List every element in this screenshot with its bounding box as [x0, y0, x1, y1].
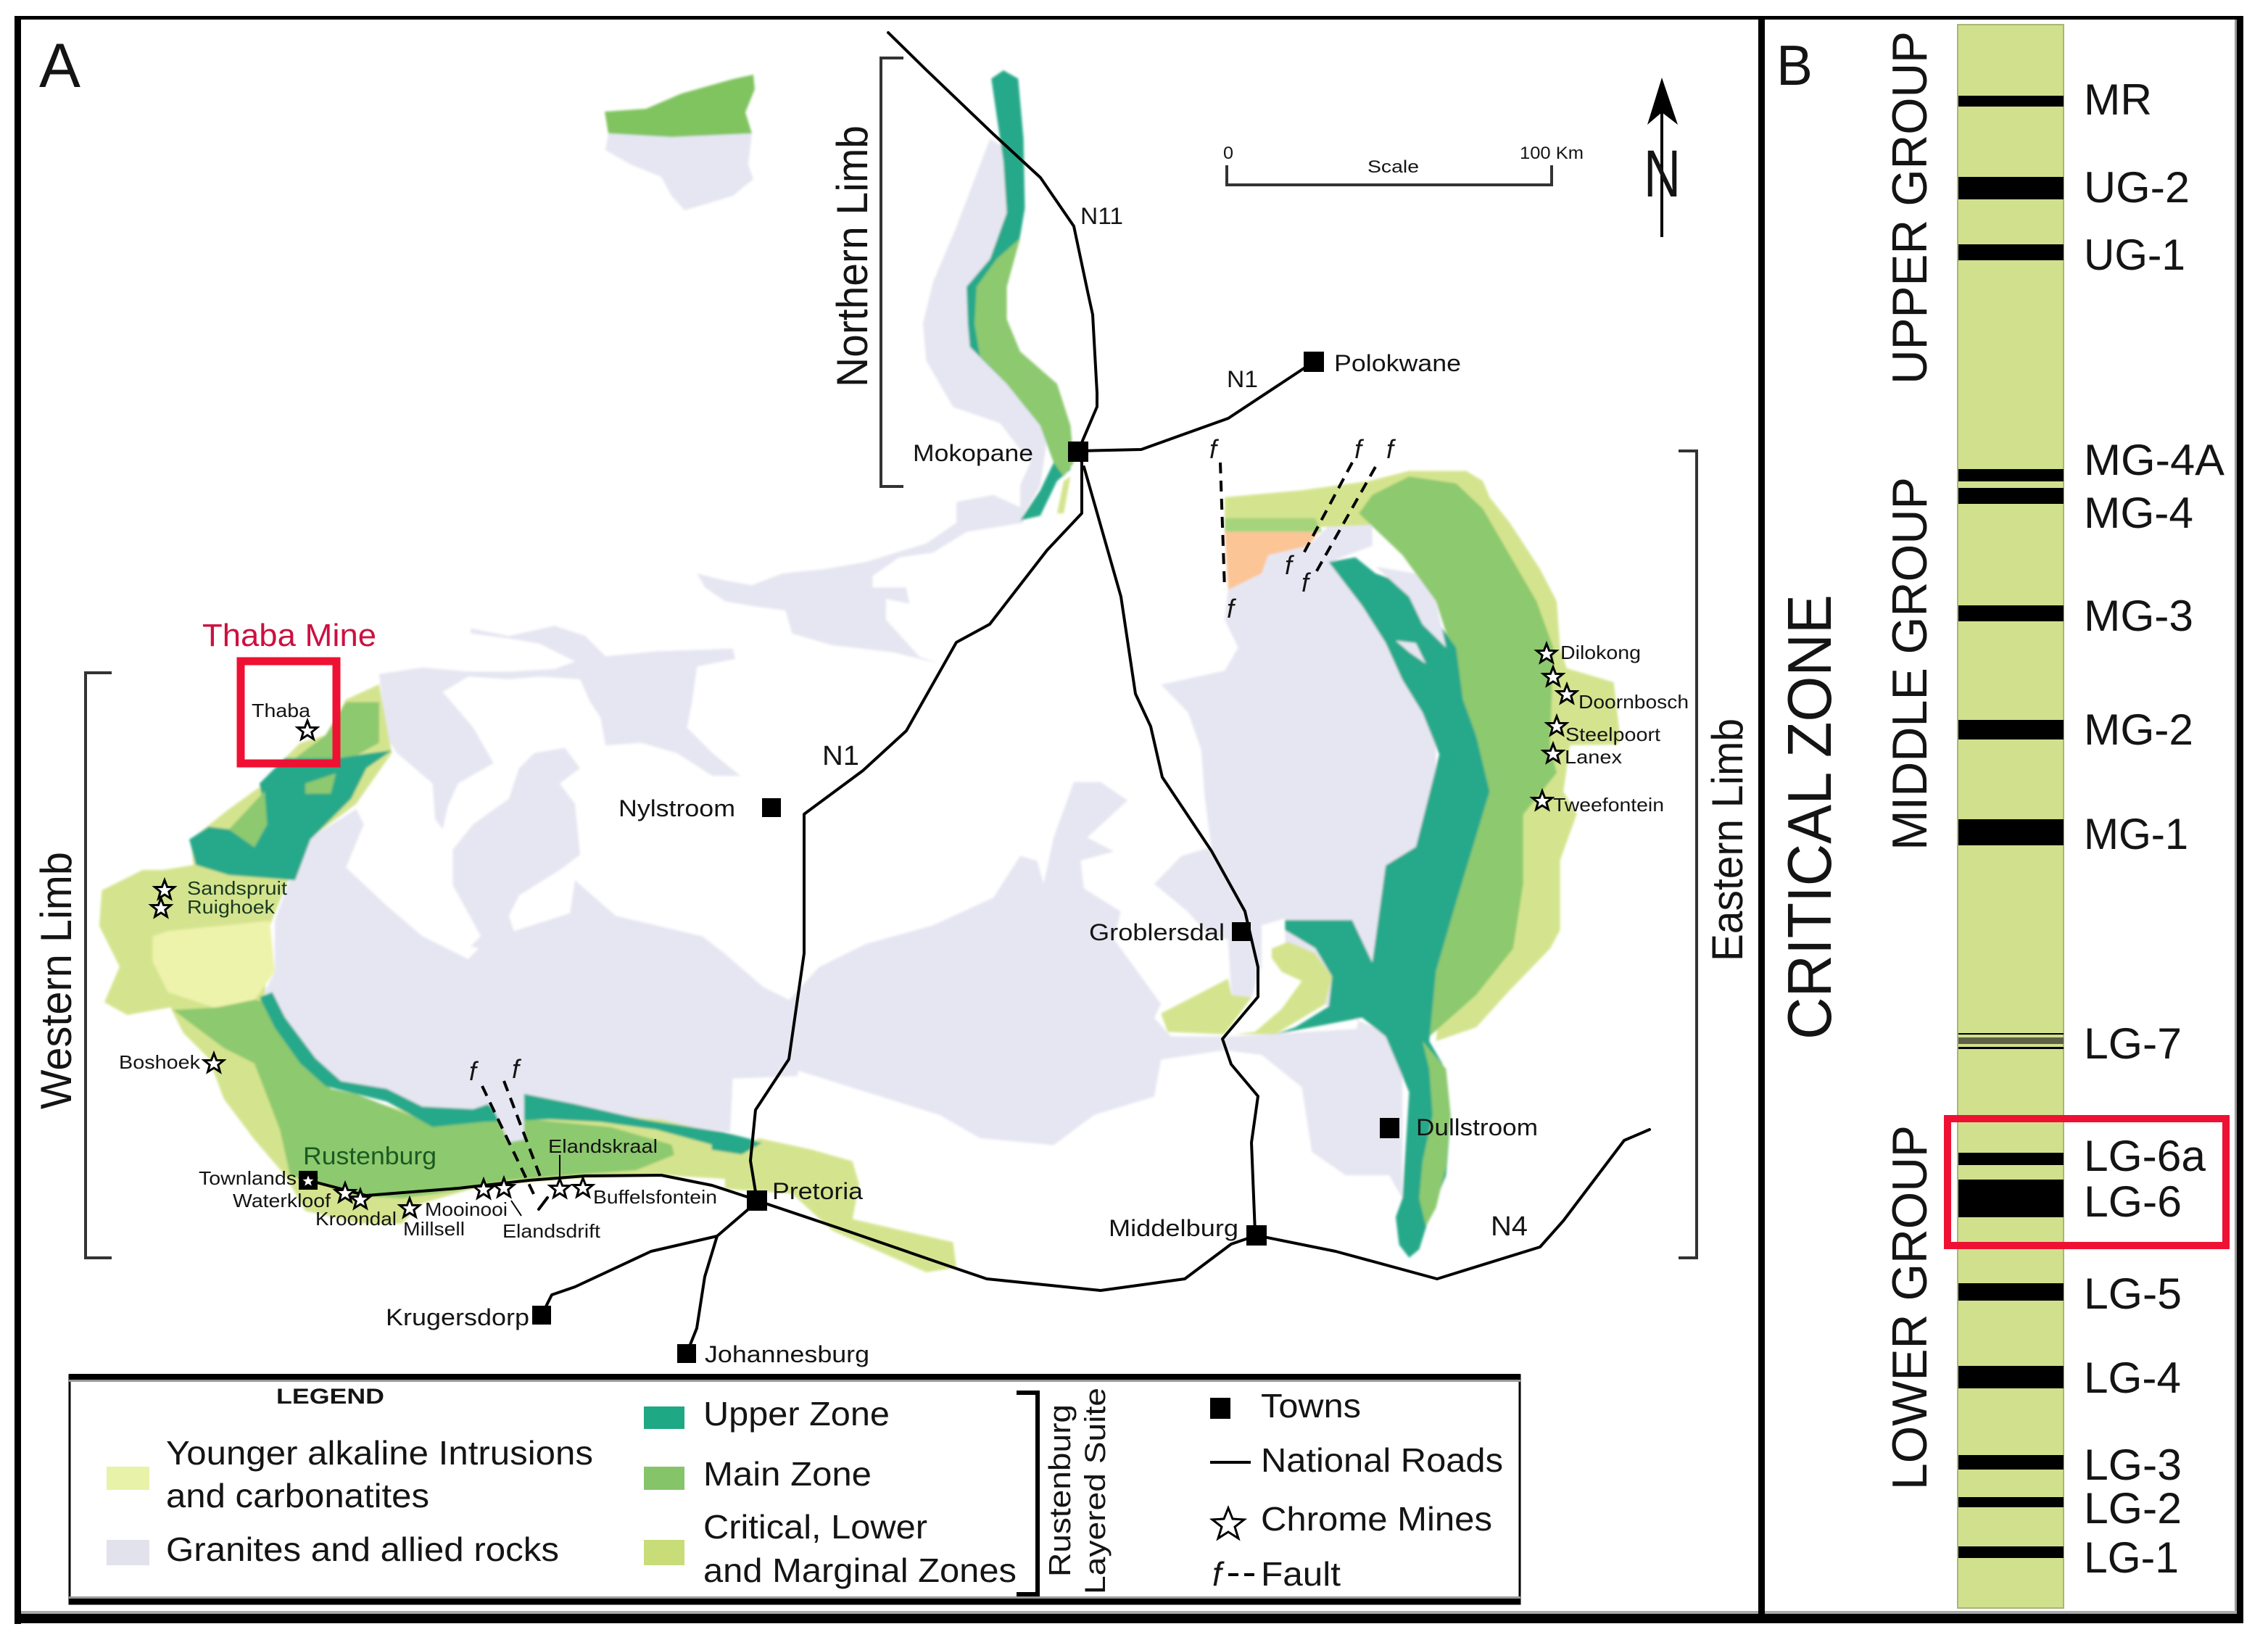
- seam labels: MG-4: [2084, 489, 2193, 537]
- callout: Thaba Mine: Thaba Mine: [202, 618, 376, 653]
- legend item: national roads: National Roads: [1261, 1441, 1503, 1479]
- seam labels: LG-6a: [2084, 1132, 2206, 1180]
- heading: Upper Group: UPPER GROUP: [1882, 31, 1937, 384]
- Rustenburg Layered Suite bracket: [1017, 1388, 1112, 1594]
- seam labels: MR: [2084, 75, 2152, 124]
- mine labels: Sandspruit: [187, 877, 288, 899]
- icon: north arrow: [1644, 78, 1681, 237]
- faults: f: [1301, 568, 1312, 597]
- mine labels: Tweefontein: [1553, 794, 1664, 816]
- northern limb zones: [967, 70, 1070, 521]
- mine labels: Boshoek: [119, 1051, 201, 1073]
- national roads: [308, 33, 1650, 1354]
- Rustenburg Layered Suite bracket: Layered Suite: [1080, 1388, 1112, 1594]
- panel: B Critical Zone column: [1776, 25, 2226, 1608]
- seam labels: UG-2: [2084, 163, 2190, 212]
- panel: A geological map: [32, 31, 1752, 1604]
- western limb zones: [99, 684, 763, 1224]
- legend: [69, 1374, 1520, 1604]
- mine labels: Buffelsfontein: [593, 1186, 717, 1208]
- scale bar: 100 Km: [1520, 144, 1584, 163]
- panel label B: B: [1776, 33, 1813, 97]
- heading: Lower Group: LOWER GROUP: [1882, 1125, 1937, 1490]
- road labels: N1: [1227, 366, 1258, 392]
- legend item: granites: Granites and allied rocks: [166, 1530, 559, 1568]
- highlight box: LG-6 seams: [1948, 1119, 2226, 1246]
- map: geological zones: [99, 70, 1621, 1272]
- town labels: [303, 350, 1538, 1367]
- legend item: chrome mines: Chrome Mines: [1261, 1500, 1492, 1538]
- western granites: [265, 626, 798, 1132]
- legend item: critical, lower and marginal zones: [644, 1508, 1017, 1589]
- mine labels: Kroondal: [315, 1208, 397, 1230]
- limb bracket: Northern Limb: Northern Limb: [828, 125, 877, 387]
- town labels: Groblersdal: [1089, 919, 1225, 945]
- faults: f: [1354, 434, 1365, 464]
- heading: Middle Group: MIDDLE GROUP: [1882, 477, 1937, 850]
- mine labels: Elandskraal: [548, 1135, 658, 1157]
- road labels: N1: [822, 741, 859, 771]
- icon: north arrow: N: [1644, 137, 1681, 211]
- heading: Critical Zone: CRITICAL ZONE: [1776, 594, 1845, 1040]
- chrome mine stars: [151, 644, 1576, 1217]
- limb bracket: Western Limb: Western Limb: [32, 852, 80, 1109]
- mine labels: Doornbosch: [1578, 691, 1689, 713]
- mine labels: Millsell: [403, 1218, 465, 1240]
- eastern limb zones: [1225, 471, 1621, 1041]
- seam labels: LG-5: [2084, 1269, 2182, 1318]
- legend item: towns: Towns: [1261, 1387, 1361, 1425]
- limb bracket: Eastern Limb: [1679, 451, 1752, 1258]
- town labels: Nylstroom: [618, 795, 735, 821]
- seam labels: MG-2: [2084, 705, 2193, 754]
- central and eastern granites: [785, 782, 1402, 1198]
- Rustenburg Layered Suite bracket: Rustenburg: [1043, 1404, 1077, 1577]
- faults: f: [1285, 550, 1295, 580]
- mine labels: Elandsdrift: [502, 1220, 601, 1242]
- legend item: fault: Fault: [1261, 1555, 1341, 1593]
- legend item: towns: [1210, 1387, 1361, 1425]
- mine labels: Townlands: [199, 1167, 297, 1189]
- mine labels: Waterkloof: [233, 1190, 331, 1211]
- town labels: Johannesburg: [705, 1341, 869, 1367]
- seam labels: LG-4: [2084, 1354, 2181, 1402]
- seam labels: MG-3: [2084, 592, 2193, 640]
- legend item: younger alkaline intrusions: [107, 1434, 593, 1515]
- seam labels: UG-1: [2084, 231, 2185, 279]
- town labels: Pretoria: [772, 1178, 863, 1204]
- limb bracket: Western Limb: [32, 673, 112, 1258]
- north-west outlier patch: [605, 75, 755, 210]
- faults: f: [1227, 594, 1237, 623]
- seam labels: [2084, 75, 2224, 1582]
- scale bar: Scale: [1367, 157, 1419, 177]
- mine labels: Ruighoek: [187, 896, 276, 918]
- town labels: Dullstroom: [1416, 1114, 1538, 1140]
- town labels: Rustenburg: [303, 1143, 436, 1170]
- seam labels: LG-3: [2084, 1441, 2182, 1489]
- legend item: fault: [1212, 1555, 1341, 1593]
- panel label A: A: [39, 31, 81, 101]
- legend item: critical, lower and marginal zones: Critical, Lower: [703, 1508, 927, 1546]
- legend item: main zone: Main Zone: [703, 1455, 872, 1493]
- callout: Thaba Mine: [202, 618, 376, 763]
- mine labels: Mooinooi: [425, 1198, 508, 1220]
- stratigraphic column: [1958, 25, 2064, 1608]
- road labels: N11: [1080, 203, 1123, 229]
- faults: f: [1209, 434, 1220, 464]
- limb bracket: Northern Limb: [828, 58, 903, 486]
- mine labels: Dilokong: [1560, 642, 1641, 663]
- seam labels: LG-7: [2084, 1019, 2182, 1068]
- town labels: Polokwane: [1334, 350, 1461, 376]
- seam labels: MG-1: [2084, 810, 2188, 858]
- mine labels: [119, 642, 1689, 1242]
- seam labels: LG-2: [2084, 1484, 2182, 1533]
- seam labels: LG-1: [2084, 1533, 2179, 1582]
- faults: f: [512, 1054, 522, 1084]
- scale bar: 0: [1223, 144, 1233, 163]
- town labels: Middelburg: [1109, 1215, 1238, 1241]
- mine labels: Thaba: [252, 700, 311, 721]
- legend title: LEGEND: [276, 1385, 384, 1409]
- legend item: main zone: [644, 1455, 872, 1493]
- legend item: upper zone: Upper Zone: [703, 1395, 890, 1433]
- mine labels: Lanex: [1565, 746, 1622, 768]
- town markers: [299, 352, 1399, 1363]
- seam labels: LG-6: [2084, 1177, 2182, 1226]
- town labels: Mokopane: [913, 440, 1033, 466]
- mine labels: Steelpoort: [1565, 724, 1661, 745]
- faults: [469, 434, 1396, 1209]
- legend item: fault: f: [1212, 1555, 1225, 1593]
- scale bar: [1223, 144, 1584, 185]
- seam labels: MG-4A: [2084, 436, 2224, 484]
- road labels: [822, 203, 1528, 1242]
- limb bracket: Eastern Limb: Eastern Limb: [1703, 718, 1752, 961]
- legend item: younger alkaline intrusions: Younger alkaline Intrusions: [166, 1434, 593, 1472]
- faults: f: [1386, 434, 1396, 464]
- faults: f: [469, 1056, 479, 1086]
- road labels: N4: [1491, 1211, 1528, 1242]
- legend item: younger alkaline intrusions: and carbonatites: [166, 1477, 429, 1515]
- town labels: Krugersdorp: [386, 1304, 529, 1330]
- Pretoria tail of the western limb: [712, 1134, 956, 1272]
- legend item: critical, lower and marginal zones: and Marginal Zones: [703, 1551, 1017, 1589]
